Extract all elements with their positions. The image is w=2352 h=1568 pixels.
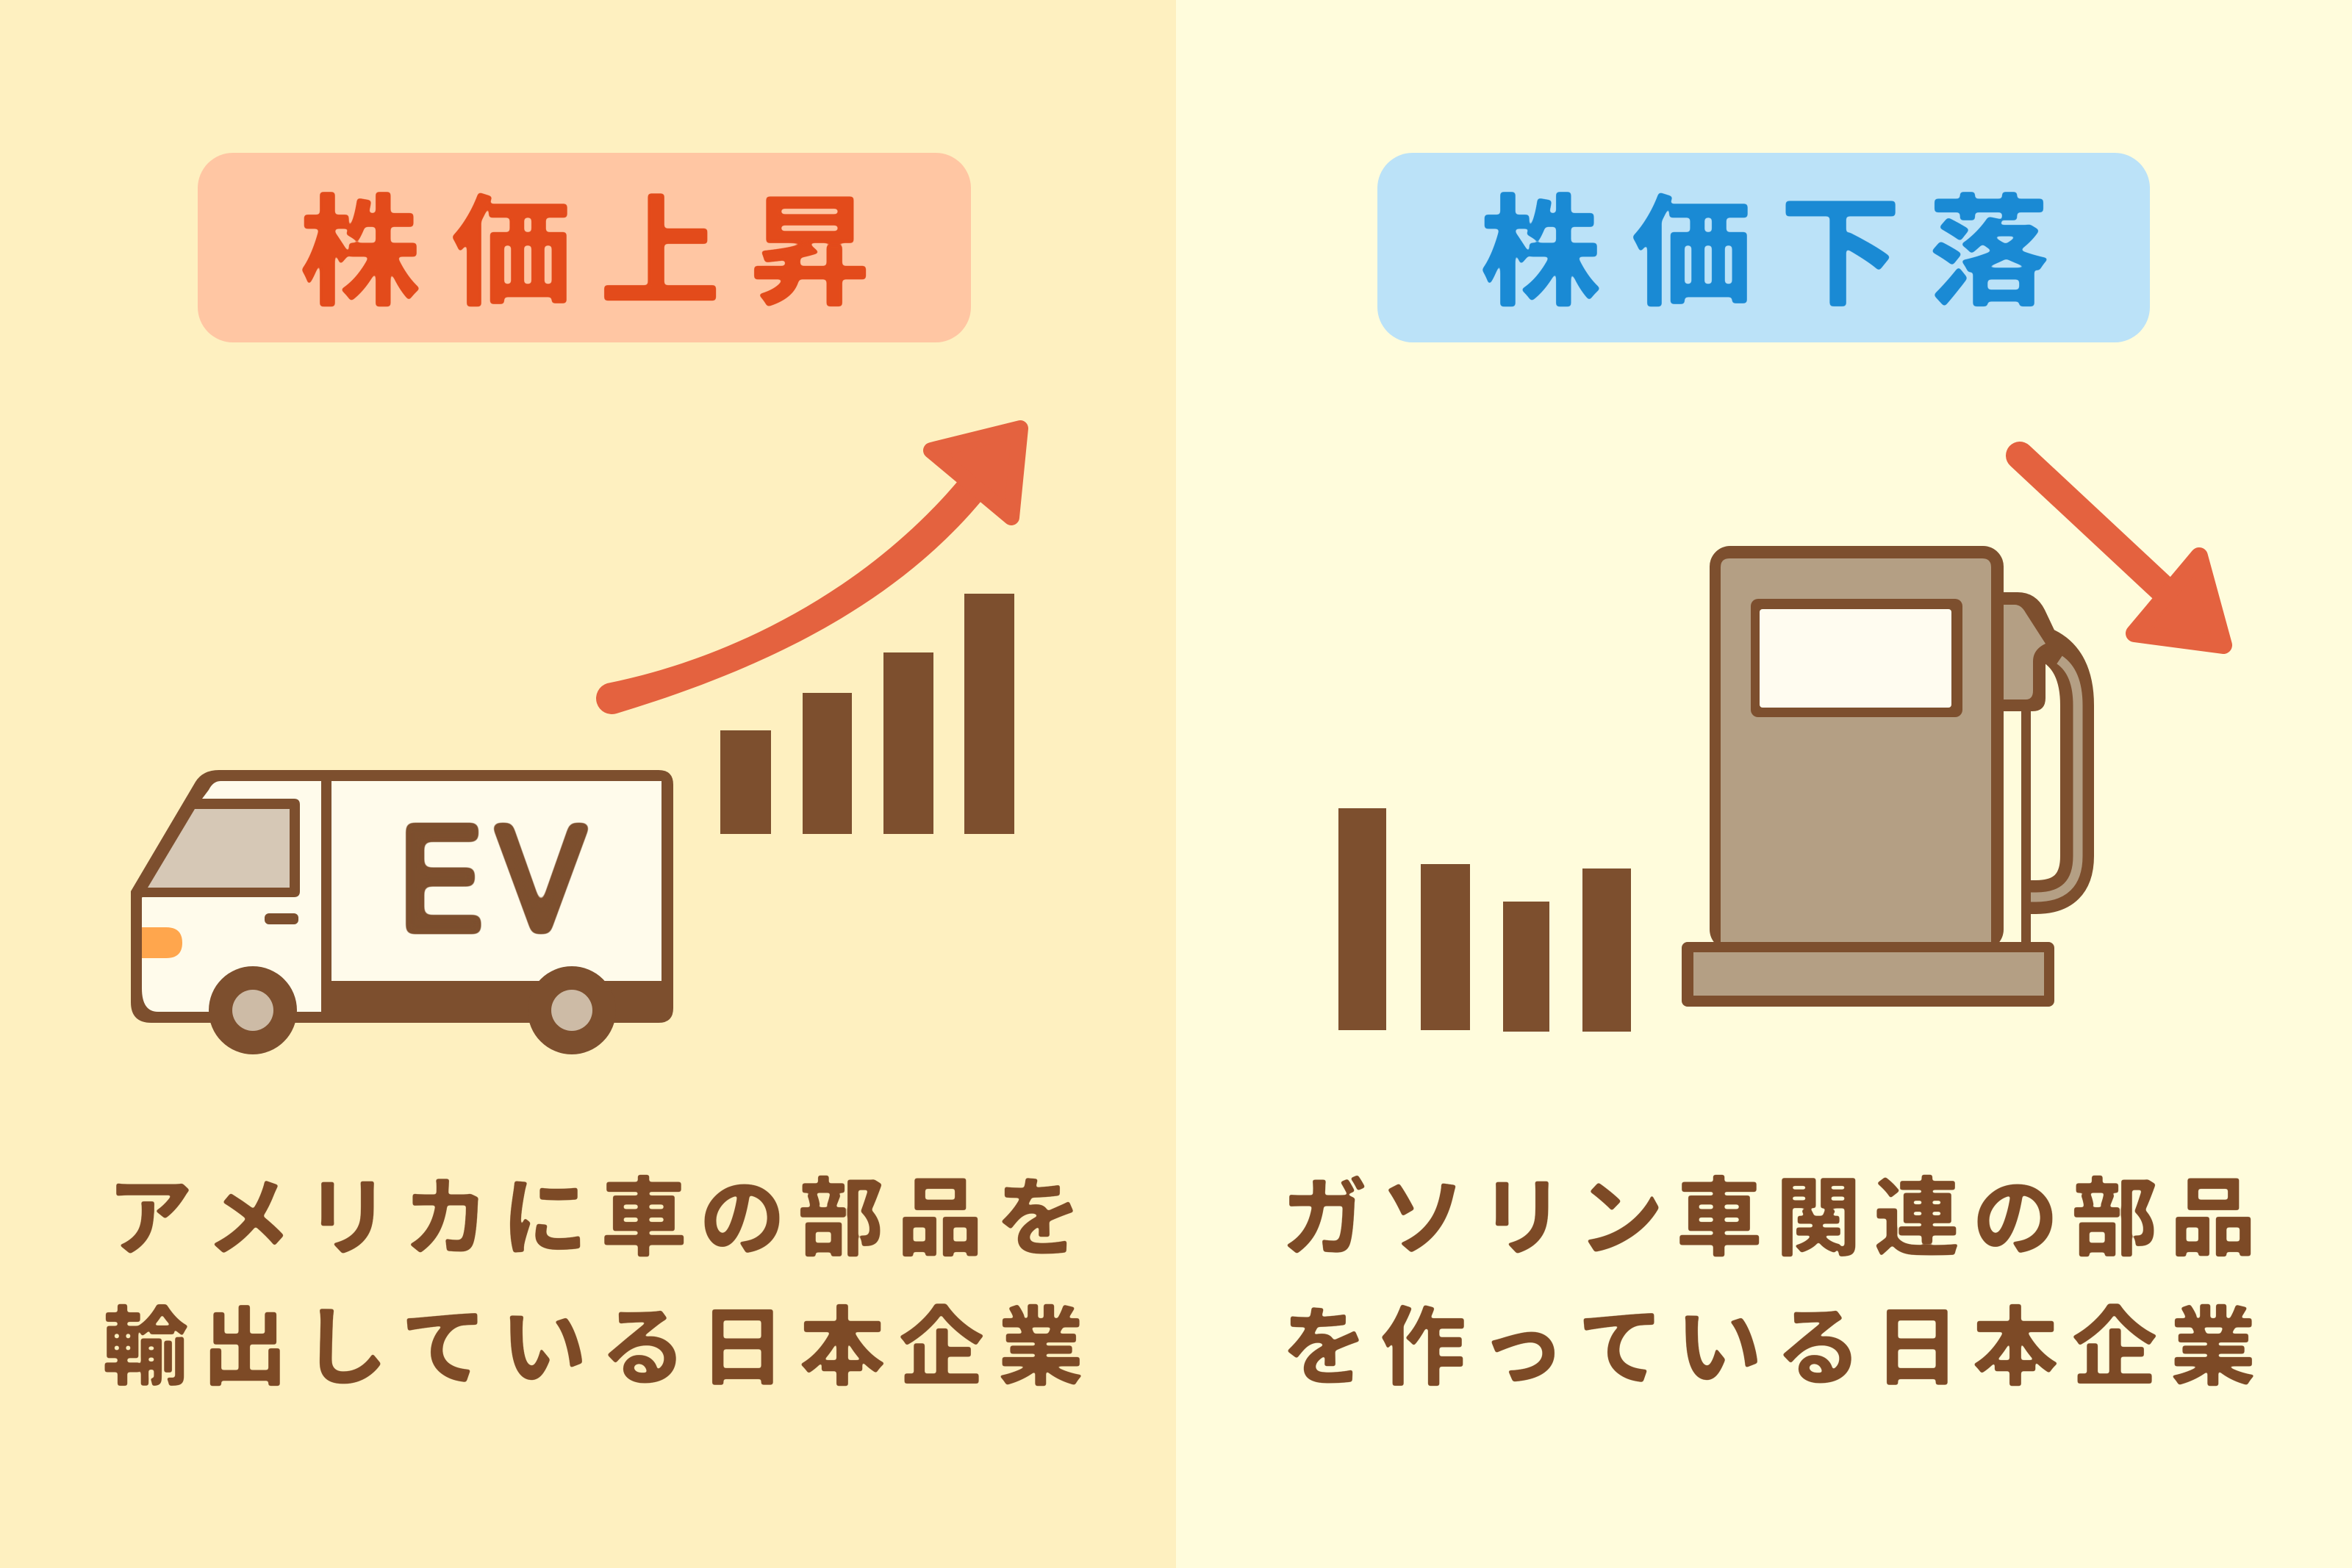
panel: stock rise xyxy=(0,0,1176,1568)
arrow: rising xyxy=(596,428,1020,714)
text: description right xyxy=(1281,1170,2256,1396)
heading: stock fall xyxy=(1377,153,2150,342)
text: description left xyxy=(102,1170,1084,1396)
bar chart: falling bars xyxy=(1338,808,1631,1032)
heading: stock rise: 株価上昇 xyxy=(300,186,870,321)
icon: EV truck xyxy=(131,770,673,1054)
heading: stock rise xyxy=(198,153,971,342)
panel: stock fall xyxy=(1176,0,2352,1568)
icon: gas pump xyxy=(1682,546,2078,1007)
label: EV xyxy=(399,794,587,963)
text: description right: ガソリン車関連の部品 xyxy=(1281,1170,2256,1267)
label: EV: V xyxy=(495,794,587,963)
text: description right: を作っている日本企業 xyxy=(1281,1300,2256,1396)
heading: stock fall: 株価下落 xyxy=(1480,186,2049,321)
arrow: falling xyxy=(2020,456,2223,645)
text: description left: 輸出している日本企業 xyxy=(102,1300,1084,1396)
label: EV: E xyxy=(399,795,483,963)
bar chart: rising bars xyxy=(720,594,1014,834)
text: description left: アメリカに車の部品を xyxy=(107,1170,1082,1267)
